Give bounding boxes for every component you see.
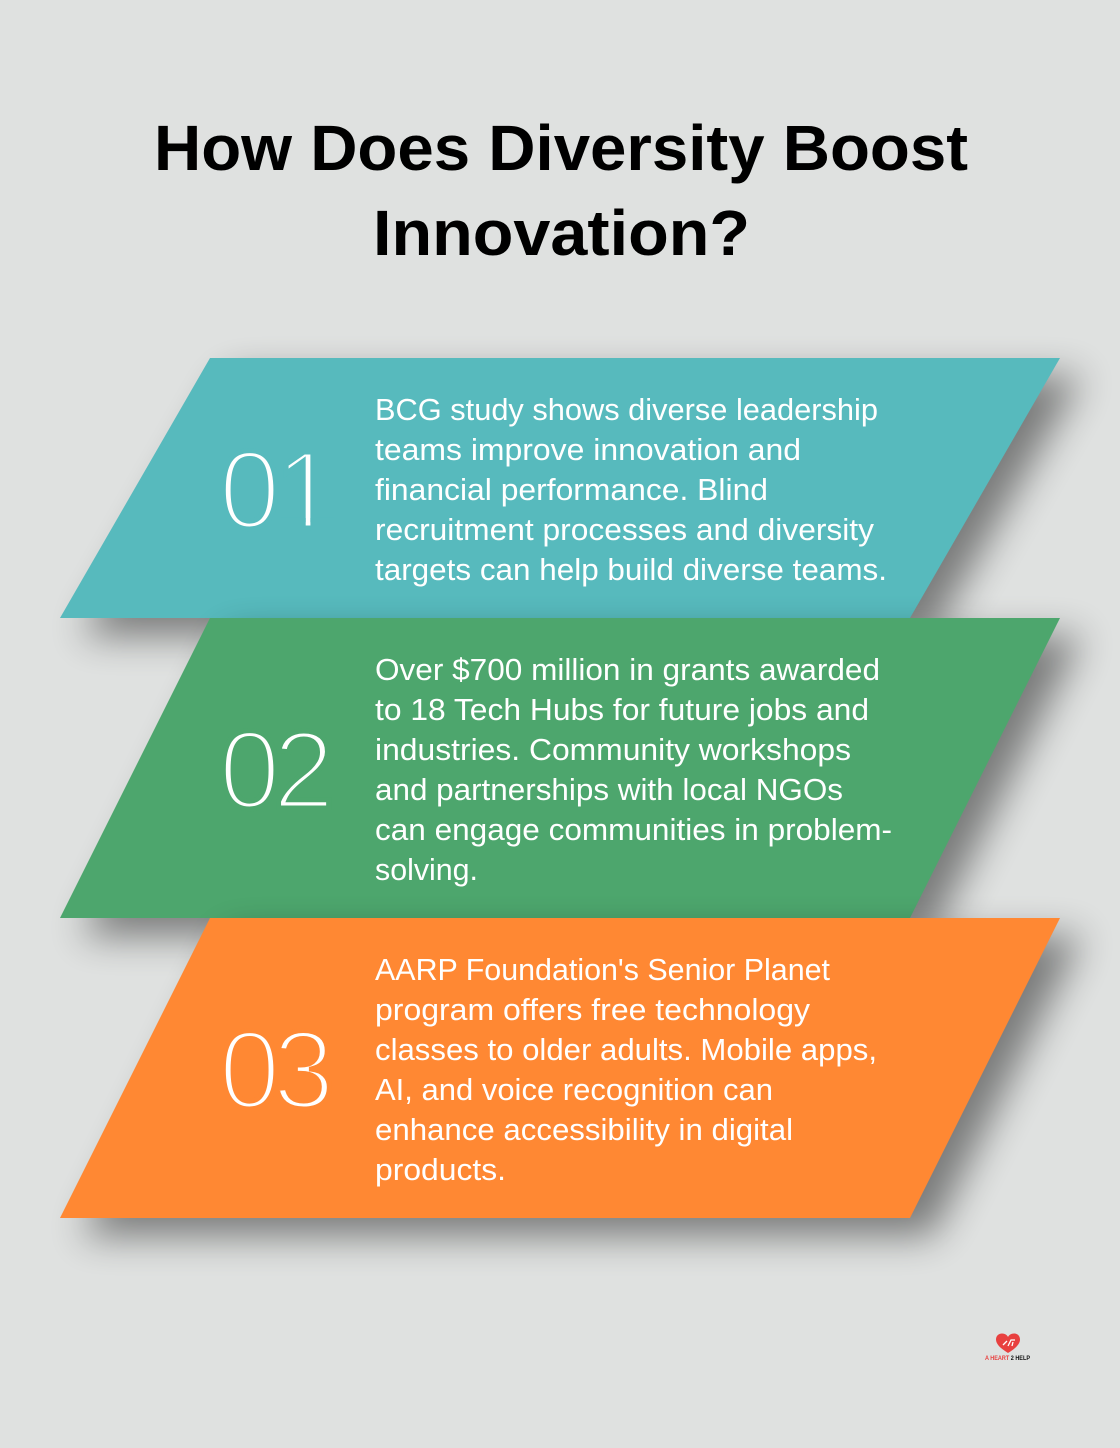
- text block 02: solving.: [375, 853, 478, 887]
- panel: 03: [60, 918, 1060, 1218]
- text block 02: [375, 653, 892, 887]
- panel shape: green parallelogram: [60, 618, 1060, 918]
- text block 01: recruitment processes and diversity: [375, 513, 875, 547]
- text block 03: AI, and voice recognition can: [375, 1073, 773, 1107]
- number 03: 03: [219, 1009, 334, 1132]
- panel: 01: [60, 358, 1060, 618]
- text block 02: industries. Community workshops: [375, 733, 851, 767]
- text block 02: Over $700 million in grants awarded: [375, 653, 880, 687]
- icon: heart: [996, 1334, 1020, 1353]
- text block 03: [375, 953, 877, 1187]
- text block 02: to 18 Tech Hubs for future jobs and: [375, 693, 869, 727]
- text block 03: AARP Foundation's Senior Planet: [375, 953, 831, 987]
- text block 03: program offers free technology: [375, 993, 811, 1027]
- panel: 02: [60, 618, 1060, 918]
- text block 03: classes to older adults. Mobile apps,: [375, 1033, 877, 1067]
- text block 01: teams improve innovation and: [375, 433, 801, 467]
- text block 01: BCG study shows diverse leadership: [375, 393, 878, 427]
- text block 01: [375, 393, 887, 587]
- title: Innovation?: [373, 197, 750, 269]
- logo wordmark: A HEART 2 HELP: [985, 1356, 1030, 1362]
- text block 02: and partnerships with local NGOs: [375, 773, 843, 807]
- title: How Does Diversity Boost: [154, 112, 968, 184]
- logo: A Heart 2 Help: [985, 1334, 1030, 1362]
- title: [154, 112, 968, 269]
- text block 03: products.: [375, 1153, 506, 1187]
- text block 03: enhance accessibility in digital: [375, 1113, 793, 1147]
- panel shape: teal parallelogram: [60, 358, 1060, 618]
- text block 02: can engage communities in problem-: [375, 813, 892, 847]
- number 02: 02: [219, 709, 334, 832]
- text block 01: targets can help build diverse teams.: [375, 553, 887, 587]
- panel shape: orange parallelogram: [60, 918, 1060, 1218]
- text block 01: financial performance. Blind: [375, 473, 768, 507]
- number 01: 01: [219, 429, 337, 552]
